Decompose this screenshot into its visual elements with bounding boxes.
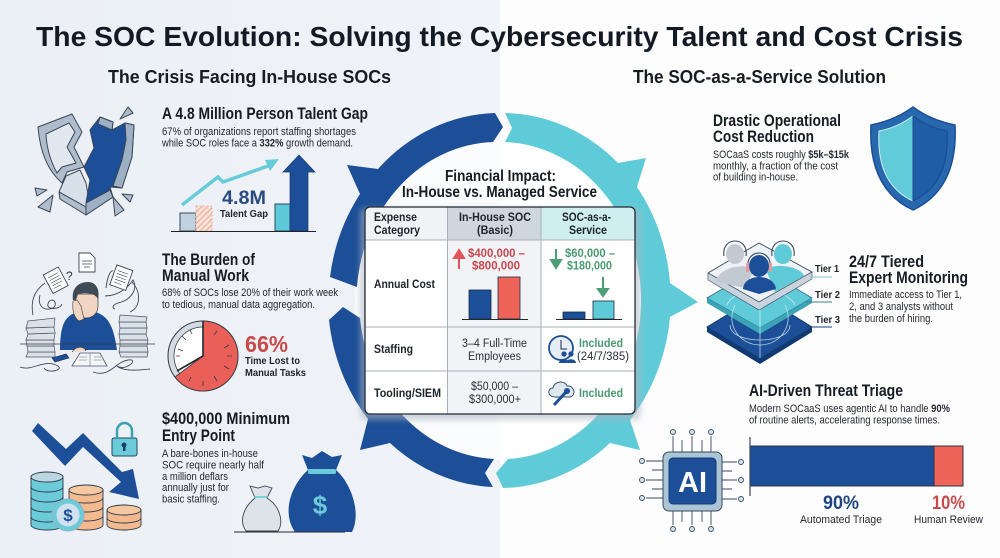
block: AI triage xyxy=(749,382,951,426)
manual work body: to tedious, manual data aggregation. xyxy=(162,299,315,311)
stat label: time lost: Time Lost to xyxy=(245,355,300,367)
icon: shield xyxy=(871,107,955,210)
stat label: talent gap: Talent Gap xyxy=(220,209,268,220)
central cycle ring xyxy=(329,113,698,488)
tier labels: Tier 1 xyxy=(815,263,839,275)
manual work heading: Manual Work xyxy=(162,267,250,285)
AI triage heading: AI-Driven Threat Triage xyxy=(749,382,903,400)
cost reduction heading: Drastic Operational xyxy=(713,112,841,130)
stat: 4.8M: 4.8M xyxy=(222,187,266,209)
row: tooling/SIEM: Tooling/SIEM xyxy=(374,388,441,400)
row: annual cost: $400,000 – xyxy=(468,248,526,260)
monitoring body: Immediate access to Tier 1, xyxy=(849,289,962,301)
stat: 10% human xyxy=(914,493,983,526)
icon: overwhelmed analyst: ? xyxy=(66,269,73,283)
entry point body: SOC require nearly half xyxy=(162,460,264,472)
manual work body: 68% of SOCs lose 20% of their work week xyxy=(162,287,339,299)
icon: AI chip xyxy=(640,430,744,532)
entry point body: annually just for xyxy=(162,482,229,494)
chart: talent gap bars and arrow xyxy=(171,155,316,232)
row: staffing: Employees xyxy=(468,351,521,363)
icon: money bags: $ xyxy=(313,490,328,520)
title: The SOC Evolution: Solving the Cybersecurity Talent and Cost Crisis xyxy=(36,21,963,52)
row: tooling/SIEM: $50,000 – xyxy=(471,381,519,393)
row: annual cost xyxy=(374,248,622,320)
row: annual cost: $800,000 xyxy=(472,260,520,272)
stat: 66%: 66% xyxy=(245,331,288,357)
table header xyxy=(374,212,611,237)
block: talent gap xyxy=(161,105,368,150)
row: staffing: 3–4 Full-Time xyxy=(462,338,527,350)
monitoring body: 2, and 3 analysts without xyxy=(849,301,953,313)
table header: Category xyxy=(374,225,421,237)
row: tooling/SIEM: $300,000+ xyxy=(469,394,521,406)
table header: SOC-as-a- xyxy=(562,212,611,224)
stat: 10% human: Human Review xyxy=(914,514,983,526)
chart: clock 66% xyxy=(168,321,306,391)
icon: falling arrow, lock and coins: $ xyxy=(63,506,73,525)
stat: 90% automated: 90% xyxy=(823,493,859,514)
heading: crisis: The Crisis Facing In-House SOCs xyxy=(108,67,391,87)
row: staffing: Included xyxy=(579,338,623,350)
cost reduction body: SOCaaS costs roughly $5k–$15k xyxy=(713,149,855,161)
stat: 90% automated: Automated Triage xyxy=(800,514,882,526)
tier labels: Tier 2 xyxy=(815,289,840,301)
row: staffing: (24/7/385) xyxy=(577,351,629,363)
cost reduction heading: Cost Reduction xyxy=(713,128,814,146)
AI triage body: of routine alerts, accelerating response times. xyxy=(749,414,940,426)
cost reduction body: of building in-house. xyxy=(713,172,798,184)
entry point heading: $400,000 Minimum xyxy=(162,410,290,428)
talent gap heading: A 4.8 Million Person Talent Gap xyxy=(162,105,368,123)
table header: Service xyxy=(569,225,607,237)
panel: financial impact xyxy=(360,168,641,420)
row: tooling/SIEM: Included xyxy=(579,388,623,400)
heading: solution: The SOC-as-a-Service Solution xyxy=(633,67,886,87)
chart: triage split bar xyxy=(750,437,983,526)
row: annual cost: $60,000 – xyxy=(565,248,616,260)
table header: Expense xyxy=(374,212,417,224)
stat label: time lost: Manual Tasks xyxy=(245,367,306,379)
table header: (Basic) xyxy=(477,225,513,237)
stat: 10% human: 10% xyxy=(932,493,965,514)
row: tooling/SIEM xyxy=(374,381,623,406)
stat: 90% automated xyxy=(800,493,882,526)
icon: overwhelmed analyst xyxy=(20,253,155,373)
financial impact heading: In-House vs. Managed Service xyxy=(402,184,597,201)
icon: broken shield xyxy=(35,107,134,216)
icon: tiered analysts stack xyxy=(707,241,840,364)
row: staffing: Staffing xyxy=(374,344,413,356)
monitoring body: the burden of hiring. xyxy=(849,313,933,325)
entry point body: a million deflars xyxy=(162,471,228,483)
AI triage body: Modern SOCaaS uses agentic AI to handle 90% xyxy=(749,403,952,415)
tier labels: Tier 3 xyxy=(815,314,840,326)
row: annual cost: $180,000 xyxy=(567,260,612,272)
icon: money bags xyxy=(234,451,356,532)
monitoring heading: Expert Monitoring xyxy=(849,269,968,287)
block: burden of manual work xyxy=(162,251,339,311)
block: tiered monitoring xyxy=(849,253,968,325)
talent gap body: while SOC roles face a 332% growth demand. xyxy=(162,138,362,150)
talent gap body: 67% of organizations report staffing shortages xyxy=(162,126,356,138)
tier labels xyxy=(806,263,840,327)
entry point body: A bare-bones in-house xyxy=(162,448,258,460)
financial impact heading: Financial Impact: xyxy=(445,168,556,185)
row: staffing xyxy=(374,336,629,363)
monitoring heading: 24/7 Tiered xyxy=(849,253,924,271)
block: minimum entry point xyxy=(162,410,290,506)
block: cost reduction xyxy=(713,112,849,184)
entry point body: basic staffing. xyxy=(162,494,220,506)
comparison table xyxy=(365,207,635,414)
table header: In-House SOC xyxy=(459,212,531,224)
manual work heading: The Burden of xyxy=(162,251,255,269)
row: annual cost: Annual Cost xyxy=(374,279,435,291)
icon: AI chip: AI xyxy=(678,467,707,499)
cost reduction body: monthly, a fraction of the cost xyxy=(713,160,838,172)
entry point heading: Entry Point xyxy=(162,427,235,445)
icon: falling arrow, lock and coins xyxy=(31,423,141,531)
